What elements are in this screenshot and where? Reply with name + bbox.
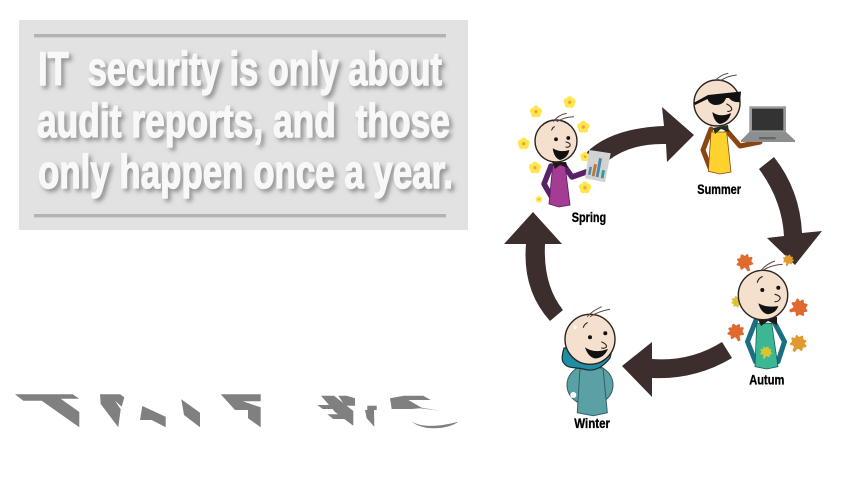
heading text: IT security is only about [38,42,442,95]
arrow: winter to spring [504,212,563,321]
arrow: summer to autumn [759,157,822,265]
label: summer: Summer [697,181,741,197]
label: spring: Spring [572,209,606,225]
label: winter: Winter [574,415,610,431]
label: autumn: Autum [749,372,784,388]
heading text [37,42,453,198]
character: summer [694,73,795,197]
arrow: autumn to winter [622,342,732,397]
icon: sunglasses [694,92,741,105]
icon: report with bar chart [585,150,611,182]
character: spring [518,96,611,225]
character: winter [562,306,615,431]
icon: laptop [741,106,795,142]
icon: falling leaves [726,252,809,354]
character: autumn [726,252,809,388]
heading text: only happen once a year. [38,145,453,198]
gray fragmented shapes [15,394,458,428]
heading text: audit reports, and those [37,94,450,147]
arrow: spring to summer [587,107,694,168]
icon: flowers [518,96,591,202]
panel: statement [19,20,468,230]
